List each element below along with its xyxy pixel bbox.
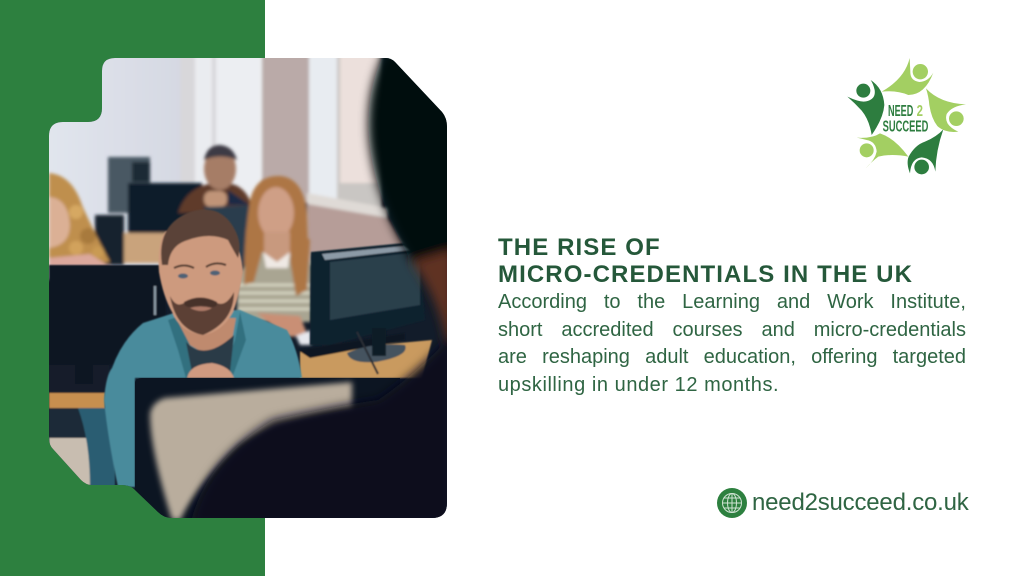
icon: globe: [717, 488, 747, 518]
body text: [498, 291, 966, 396]
right light figure: [926, 88, 966, 132]
logo wordmark: [883, 103, 928, 135]
face: [159, 220, 243, 335]
desks and monitors: [49, 243, 432, 490]
base layer: [40, 50, 450, 530]
logo wordmark: NEED: [888, 103, 913, 120]
hand: [187, 363, 234, 378]
back man: [178, 184, 253, 214]
eyes and brows: [178, 274, 188, 278]
heading: [498, 234, 913, 288]
man in teal shirt: [104, 210, 302, 487]
body text: are reshaping adult education, offering targeted: [498, 346, 966, 368]
background wall and windows: [40, 50, 410, 280]
logo: Need 2 Succeed: [848, 58, 966, 174]
logo wordmark: 2: [917, 103, 923, 120]
green side panel: [0, 0, 265, 576]
heading: THE RISE OF: [498, 234, 661, 261]
right desk: [300, 340, 432, 378]
right monitor: [310, 243, 425, 345]
t-shirt: [186, 335, 234, 372]
floor left: [49, 438, 92, 490]
body text: upskilling in under 12 months.: [498, 374, 779, 396]
background desks, monitors and people: [49, 145, 311, 345]
website address: need2succeed.co.uk: [752, 489, 969, 516]
foreground monitor: [135, 378, 400, 520]
logo wordmark: SUCCEED: [883, 118, 928, 135]
beard: [170, 292, 234, 335]
bottom dark figure: [908, 129, 943, 174]
left monitor: [49, 265, 166, 365]
bottom-left light figure: [857, 133, 908, 168]
left woman: [49, 173, 110, 268]
neck: [178, 316, 237, 352]
top light figure: [882, 58, 933, 95]
hair: [161, 210, 240, 265]
woman in striped top: [242, 174, 310, 264]
classroom photo: [49, 58, 447, 518]
left dark figure: [847, 80, 884, 135]
heading: MICRO-CREDENTIALS IN THE UK: [498, 261, 913, 288]
body text: According to the Learning and Work Institute,: [498, 291, 966, 313]
presenter silhouette in foreground: [190, 52, 460, 525]
body text: short accredited courses and micro-credentials: [498, 319, 966, 341]
